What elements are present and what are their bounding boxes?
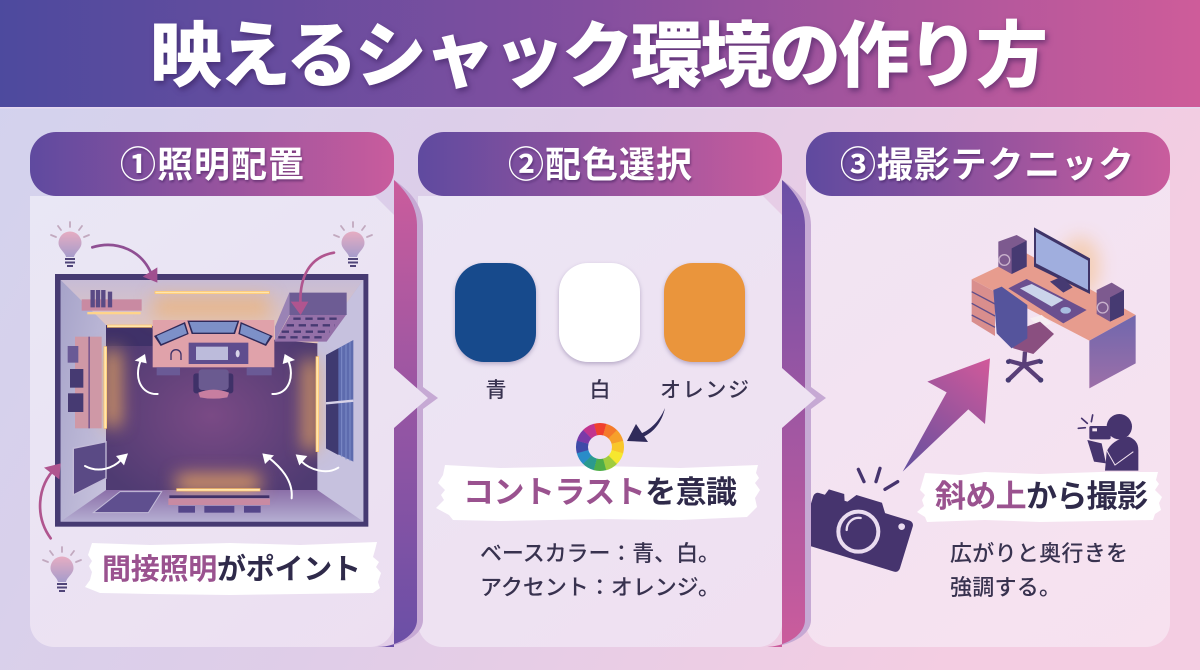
window bbox=[326, 340, 353, 462]
illustration: room top view bbox=[55, 274, 368, 527]
icon: light bulb right bbox=[334, 222, 372, 266]
text: emphasise depth bbox=[950, 541, 1128, 600]
heading: step 2 bbox=[418, 132, 782, 196]
title: 映えるシャック環境の作り方 bbox=[150, 17, 1048, 97]
shelf and books bbox=[82, 290, 142, 314]
panel: 3 photo technique bbox=[799, 132, 1170, 647]
text: base and accent colours: ベースカラー：青、白。 bbox=[480, 541, 720, 566]
title banner bbox=[0, 0, 1200, 108]
swatch: blue bbox=[455, 263, 536, 402]
heading: step 3: ③撮影テクニック bbox=[840, 144, 1134, 185]
arrow: to colour wheel bbox=[627, 408, 665, 442]
bottom furniture bbox=[168, 495, 270, 513]
text: emphasise depth: 強調する。 bbox=[950, 575, 1061, 600]
heading: step 2: ②配色選択 bbox=[508, 144, 692, 185]
desk bbox=[153, 320, 274, 399]
swatch: orange bbox=[660, 263, 749, 402]
icon: colour wheel bbox=[575, 422, 625, 472]
callout: indirect lighting is key: 間接照明がポイント bbox=[102, 552, 361, 586]
rug bbox=[93, 492, 162, 513]
callout: diagonal shot bbox=[917, 472, 1162, 522]
panel: 2 colour choice bbox=[418, 132, 826, 647]
swatch: white: 白 bbox=[590, 379, 610, 402]
ribbon: panel 2 fold bbox=[765, 180, 826, 647]
arrow: camera to desk bbox=[903, 358, 990, 472]
text: base and accent colours bbox=[480, 541, 720, 600]
text: base and accent colours: アクセント：オレンジ。 bbox=[480, 575, 720, 600]
text: emphasise depth: 広がりと奥行きを bbox=[950, 541, 1128, 566]
swatch: blue: 青 bbox=[486, 379, 506, 402]
icon: camera bbox=[799, 468, 917, 573]
icon: isometric desk bbox=[972, 227, 1136, 388]
heading: step 1 bbox=[30, 132, 394, 196]
arrows: light to room bbox=[40, 245, 334, 538]
callout: be aware of contrast bbox=[436, 465, 760, 521]
white arrows bbox=[85, 361, 338, 498]
light strips bbox=[104, 291, 319, 491]
callout: be aware of contrast: コントラストを意識 bbox=[463, 475, 737, 510]
icon: photographer bbox=[1078, 414, 1138, 471]
heading: step 1: ①照明配置 bbox=[120, 144, 304, 185]
swatch: white bbox=[559, 263, 640, 402]
callout: diagonal shot: 斜め上から撮影 bbox=[935, 479, 1148, 514]
heading: step 3 bbox=[806, 132, 1170, 196]
ribbon: panel 1 fold bbox=[377, 180, 438, 647]
door bbox=[73, 442, 106, 495]
panel: 1 lighting layout bbox=[30, 132, 438, 647]
left wall shelf and frames bbox=[68, 337, 102, 428]
swatch: orange: オレンジ bbox=[660, 379, 749, 402]
bookshelf bbox=[275, 293, 347, 342]
callout: indirect lighting is key bbox=[85, 542, 381, 595]
glow bbox=[105, 295, 317, 490]
icon: light bulb left bbox=[51, 222, 89, 266]
icon: light bulb bottom bbox=[43, 547, 81, 591]
